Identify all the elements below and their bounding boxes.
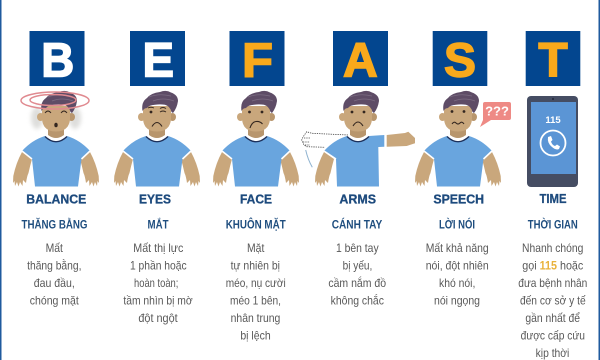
letter tile F (230, 31, 284, 88)
column: balance: thăng bằng, (27, 258, 81, 272)
column: balance: đau đầu, (34, 276, 75, 290)
figure: face, drooping mouth person (213, 91, 299, 186)
column: time: Nhanh chóng (522, 241, 583, 255)
column: time: được cấp cứu (521, 328, 585, 342)
column: eyes: EYES (139, 192, 171, 207)
column: face: KHUÔN MẶT (226, 216, 286, 231)
column: eyes: MẮT (148, 216, 169, 231)
column: arms: 1 bên tay (336, 241, 379, 255)
letter tile T: T (538, 34, 568, 88)
dotted outline of dropped arm with arrow (302, 132, 348, 167)
column: speech: LỜI NÓI (439, 216, 475, 231)
column: arms: không chắc (331, 292, 384, 308)
left border line (0, 0, 2, 360)
column: balance: THĂNG BẰNG (22, 216, 88, 231)
letter tile E: E (143, 34, 174, 88)
figure: eyes, winking person (114, 91, 200, 186)
column: eyes (123, 192, 193, 325)
icon: speech bubble with question marks: ??? (485, 104, 509, 118)
column: time: THỜI GIAN (528, 216, 578, 231)
letter tile E (130, 31, 185, 88)
letter tile A: A (343, 34, 378, 88)
column: face: méo 1 bên, (230, 294, 281, 308)
column: face: FACE (240, 192, 272, 207)
column: face: bị lệch (240, 328, 271, 342)
right border line (598, 0, 600, 360)
letter tile F: F (242, 34, 273, 88)
column: eyes: hoàn toàn; (134, 276, 178, 290)
figure: arms, one arm raised person (315, 91, 415, 186)
column: eyes: đột ngột (138, 311, 178, 325)
column: arms: ARMS (339, 192, 376, 207)
column: balance (22, 192, 88, 308)
column: arms: cầm nắm đồ (328, 275, 386, 290)
letter tile B: B (41, 34, 74, 88)
column: eyes: 1 phần hoặc (130, 258, 187, 272)
column: face: méo, nụ cười (226, 276, 286, 290)
column: time: đến cơ sở y tế (520, 294, 586, 308)
column: face: tự nhiên bị (231, 258, 280, 272)
column: time: gần nhất để (525, 311, 580, 325)
column: time (518, 191, 587, 360)
column: eyes: tầm nhìn bị mờ (123, 294, 193, 308)
column: speech: nói, đột nhiên (426, 258, 489, 272)
column: balance: chóng mặt (30, 294, 79, 308)
icon: smartphone calling 115 (527, 96, 578, 187)
figure: balance, dizzy person (13, 91, 99, 186)
column: time: kịp thời (536, 346, 569, 360)
column: arms (328, 192, 386, 308)
column: balance: BALANCE (26, 192, 87, 207)
letter tile B (30, 31, 84, 88)
column: speech: Mất khả năng (426, 241, 489, 255)
letter tile A (333, 31, 388, 88)
column: face: Mặt (247, 241, 265, 255)
icon: smartphone calling 115: 115 (545, 115, 561, 126)
column: time: đưa bệnh nhân (518, 276, 587, 290)
column: arms: bị yếu, (343, 258, 372, 272)
column: eyes: Mất thị lực (133, 241, 183, 255)
icon: speech bubble with question marks (480, 102, 511, 127)
letter tile S: S (444, 34, 476, 88)
column: face: nhân trung (231, 311, 280, 325)
column: arms: CÁNH TAY (332, 216, 382, 231)
column: speech: SPEECH (433, 192, 484, 207)
column: face (226, 192, 286, 342)
column: speech (426, 192, 489, 308)
column: speech: nói ngọng (434, 294, 480, 308)
column: speech: khó nói, (439, 276, 475, 290)
column: time: gọi 115 hoặc (522, 258, 583, 272)
figure: speech, wavy mouth person (415, 91, 501, 186)
column: balance: Mất (46, 241, 64, 255)
letter tile T (526, 31, 580, 88)
letter tile S (433, 31, 487, 88)
column: time: TIME (540, 191, 567, 206)
